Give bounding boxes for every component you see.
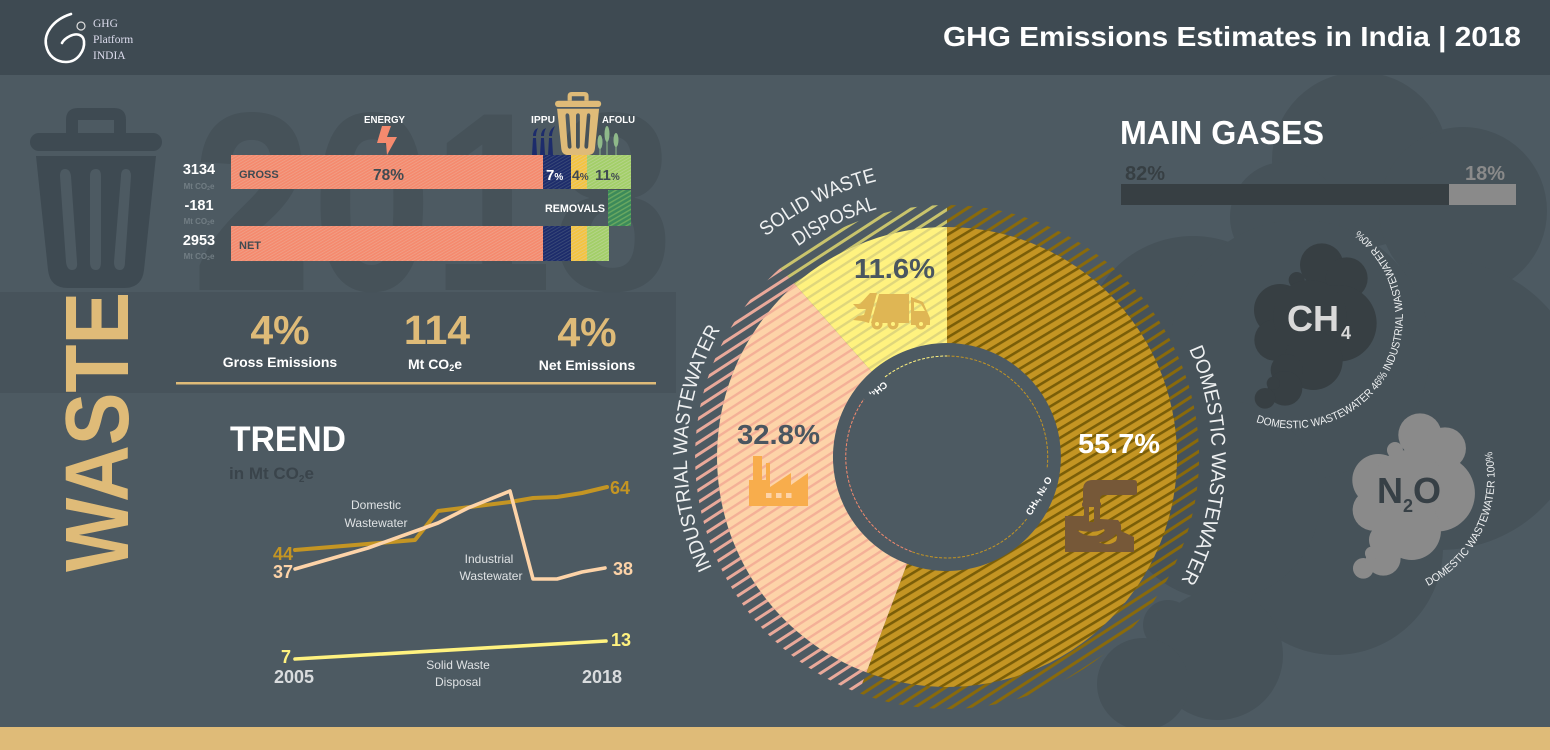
icon: small gold trash can	[555, 92, 601, 155]
slice: solid waste disposal	[795, 227, 947, 372]
trend values and labels: Solid Waste	[426, 658, 490, 672]
key statistics	[176, 307, 656, 384]
chart: gross bar: GROSS	[239, 169, 279, 181]
line: solid waste disposal	[295, 641, 606, 659]
bar totals: 2	[207, 221, 210, 227]
inner dashed gas ring	[846, 356, 1048, 558]
bar totals: Mt CO	[184, 182, 207, 191]
label: domestic wastewater: DOMESTIC WASTEWATER	[1182, 345, 1226, 584]
outer ring: domestic	[859, 205, 1199, 709]
key statistics: 4%	[557, 309, 617, 355]
heading: trend: TREND	[230, 420, 346, 459]
cloud: N2O: 2	[1403, 496, 1413, 516]
icon: sewage outflow	[1065, 480, 1137, 552]
heading: main gases: MAIN GASES	[1120, 114, 1324, 151]
line: domestic wastewater	[295, 487, 607, 550]
header bar	[0, 0, 1550, 75]
cloud: CH4: 4	[1341, 323, 1351, 343]
trend values and labels: Domestic	[351, 498, 401, 512]
curved label: CH4 sources: DOMESTIC WASTEWATER 46% INDUSTRIAL WASTEWATER 40%	[1256, 231, 1403, 428]
key statistics: e	[454, 356, 462, 372]
bar totals: -181	[184, 198, 214, 214]
line chart: trend	[295, 487, 607, 659]
trend values and labels: Disposal	[435, 675, 481, 689]
sub-heading: trend units: in Mt CO	[229, 464, 299, 483]
icon: garbage truck	[853, 293, 930, 330]
slice: domestic wastewater	[866, 227, 1177, 687]
donut chart	[673, 168, 1226, 709]
logo: GHG	[93, 18, 118, 30]
icon: AFOLU wheat	[598, 126, 618, 155]
sector labels above bars: IPPU	[531, 115, 555, 126]
inner gas label: CH4 N2O: CH4, N2 O	[1024, 475, 1055, 518]
chart: gross bar: 7%	[546, 167, 563, 184]
chart: gross bar: 78%	[373, 167, 404, 184]
sector labels above bars: AFOLU	[602, 115, 635, 126]
slice value: 11.6%: 11.6%	[854, 253, 935, 284]
sector name: WASTE: WASTE	[48, 292, 148, 572]
footer bar	[0, 727, 1550, 750]
sector labels above bars	[364, 115, 635, 126]
title: GHG Emissions Estimates in India | 2018	[943, 21, 1521, 52]
trend values and labels: 2018	[582, 667, 622, 687]
chart: gas share bar: 82%	[1125, 163, 1165, 185]
chart: net bar	[231, 226, 609, 261]
chart: removals bar: REMOVALS	[545, 203, 605, 215]
key statistics: 2	[449, 363, 454, 373]
cloud: CH4	[1254, 243, 1377, 409]
trend values and labels: 44	[273, 544, 293, 564]
slice value: 55.7%: 55.7%	[1078, 428, 1160, 459]
curved label: N2O sources: DOMESTIC WASTEWATER 100%	[1425, 452, 1495, 586]
slice: industrial wastewater	[717, 284, 907, 672]
cloud: N2O: N	[1377, 470, 1403, 511]
watermark: year 2018: 2018	[192, 60, 672, 345]
bar totals: 2	[207, 186, 210, 192]
watermark: large cloud	[1083, 72, 1550, 730]
trend values and labels: 64	[610, 478, 630, 498]
key statistics: 4%	[250, 307, 310, 353]
outer ring: industrial	[695, 268, 866, 693]
chart: gas share bar: 18%	[1465, 163, 1505, 185]
trend values and labels: 7	[281, 647, 291, 667]
trend values and labels: 2005	[274, 667, 314, 687]
bar totals	[183, 162, 215, 262]
icon: large trash can watermark	[30, 108, 162, 288]
bar totals: 3134	[183, 162, 215, 178]
chart: gas share bar	[1121, 163, 1516, 205]
chart: net bar: NET	[239, 240, 261, 252]
bar totals: e	[210, 252, 215, 261]
logo: Platform	[93, 34, 133, 46]
sub-heading: trend units: e	[304, 464, 314, 483]
bar totals: 2	[207, 256, 210, 262]
inner gas label: CH4: CH4,	[867, 379, 889, 400]
label: industrial wastewater: INDUSTRIAL WASTEWATER	[673, 325, 720, 572]
trend values and labels	[273, 478, 633, 689]
bar totals: Mt CO	[184, 217, 207, 226]
logo: INDIA	[93, 50, 126, 62]
bar totals: Mt CO	[184, 252, 207, 261]
trend values and labels: Industrial	[465, 552, 513, 566]
cloud: N2O	[1352, 413, 1475, 579]
icon: factory	[749, 456, 808, 506]
cloud: N2O: O	[1413, 470, 1441, 511]
bar totals: e	[210, 217, 215, 226]
line: industrial wastewater	[295, 491, 605, 579]
key statistics: Net Emissions	[539, 357, 635, 373]
key statistics: 114	[404, 307, 470, 353]
label: disposal: DISPOSAL	[792, 198, 876, 246]
chart: removals bar	[545, 190, 631, 226]
key statistics: Gross Emissions	[223, 354, 337, 370]
chart: gross bar	[231, 155, 631, 189]
icon: IPPU factory	[532, 126, 555, 155]
label: solid waste: SOLID WASTE	[760, 168, 876, 234]
trend values and labels: Wastewater	[345, 516, 407, 530]
trend values and labels: Wastewater	[460, 569, 522, 583]
sector labels above bars: ENERGY	[364, 115, 405, 126]
trend values and labels: 38	[613, 559, 633, 579]
watermark: band behind statistics	[0, 292, 676, 393]
logo	[46, 14, 133, 62]
bar totals: e	[210, 182, 215, 191]
chart: gross bar: 4%	[572, 167, 589, 183]
sub-heading: trend units: 2	[299, 474, 305, 485]
bar totals: 2953	[183, 233, 215, 249]
key statistics: Mt CO	[408, 356, 449, 372]
trend values and labels: 37	[273, 562, 293, 582]
trend values and labels: 13	[611, 630, 631, 650]
chart: gross bar: 11%	[595, 167, 620, 184]
outer ring: solid waste	[780, 205, 947, 284]
icon: energy lightning	[377, 126, 397, 155]
slice value: 32.8%: 32.8%	[737, 419, 820, 450]
cloud: CH4: CH	[1287, 298, 1339, 339]
